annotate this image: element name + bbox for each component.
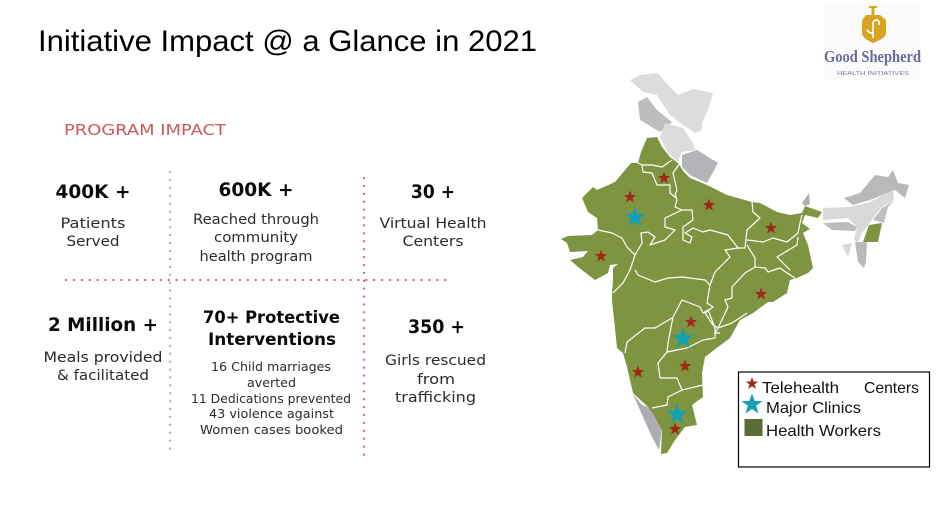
title: Initiative Impact @ a Glance in 2021 (38, 25, 537, 58)
stat: protective interventions: 16 Child marriages (211, 360, 331, 374)
stat: protective interventions: 70+ Protective (203, 308, 340, 328)
stat: patients served: Served (66, 234, 120, 250)
stat: virtual health centers: Centers (402, 234, 464, 250)
stat: patients served (56, 181, 130, 250)
stat: community health reach: Reached through (193, 212, 319, 228)
health worker states (561, 137, 822, 454)
legend: major clinics: Major Clinics (766, 400, 861, 417)
stat: girls rescued: trafficking (395, 390, 476, 406)
legend: telehealth centers: Centers (864, 380, 919, 397)
stat: meals provided: 2 Million + (48, 314, 158, 336)
dotted grid dividers (66, 172, 452, 462)
stat: girls rescued: 350 + (408, 316, 465, 338)
legend: health workers (744, 419, 881, 440)
icon: shepherd shield (862, 6, 886, 43)
stat: virtual health centers: Virtual Health (380, 216, 486, 232)
stat: community health reach: health program (200, 249, 312, 265)
stat: community health reach: community (214, 230, 298, 246)
stat: girls rescued: from (417, 372, 455, 388)
stat: meals provided: Meals provided (44, 350, 162, 366)
stat: protective interventions: averted (247, 376, 296, 390)
stat: patients served: Patients (60, 216, 126, 232)
stat: patients served: 400K + (56, 181, 130, 203)
Kerala (633, 394, 662, 450)
logo: Good Shepherd Health Initiatives: Good Shepherd (824, 47, 921, 66)
stat: protective interventions: Interventions (208, 330, 336, 350)
state borders (598, 160, 802, 408)
major clinic markers (624, 206, 694, 424)
northern states without programs (630, 73, 718, 183)
stat: virtual health centers (380, 181, 486, 250)
stat: protective interventions: Women cases booked (200, 423, 343, 437)
stat: meals provided: & facilitated (57, 368, 149, 384)
legend: health workers: Health Workers (766, 423, 881, 440)
legend: telehealth centers: Telehealth (762, 380, 839, 397)
logo: Good Shepherd Health Initiatives (824, 5, 921, 81)
section heading: program impact: PROGRAM IMPACT (64, 121, 227, 139)
telehealth center markers (595, 172, 777, 434)
legend: telehealth centers (746, 377, 919, 397)
stat: community health reach: 600K + (218, 179, 294, 201)
stat: protective interventions: 43 violence against (209, 407, 334, 421)
legend: major clinics (742, 394, 861, 417)
stat: community health reach (193, 179, 319, 265)
logo: Good Shepherd Health Initiatives: HEALTH INITIATIVES (837, 71, 909, 77)
stat: virtual health centers: 30 + (411, 181, 455, 203)
stat: meals provided (44, 314, 162, 384)
stat: protective interventions (191, 308, 351, 437)
map of India (561, 73, 909, 454)
stat: girls rescued (385, 316, 486, 406)
stat: protective interventions: 11 Dedications prevented (191, 392, 351, 406)
stat: girls rescued: Girls rescued (385, 353, 486, 369)
north-eastern states (802, 170, 909, 268)
legend (738, 372, 930, 467)
